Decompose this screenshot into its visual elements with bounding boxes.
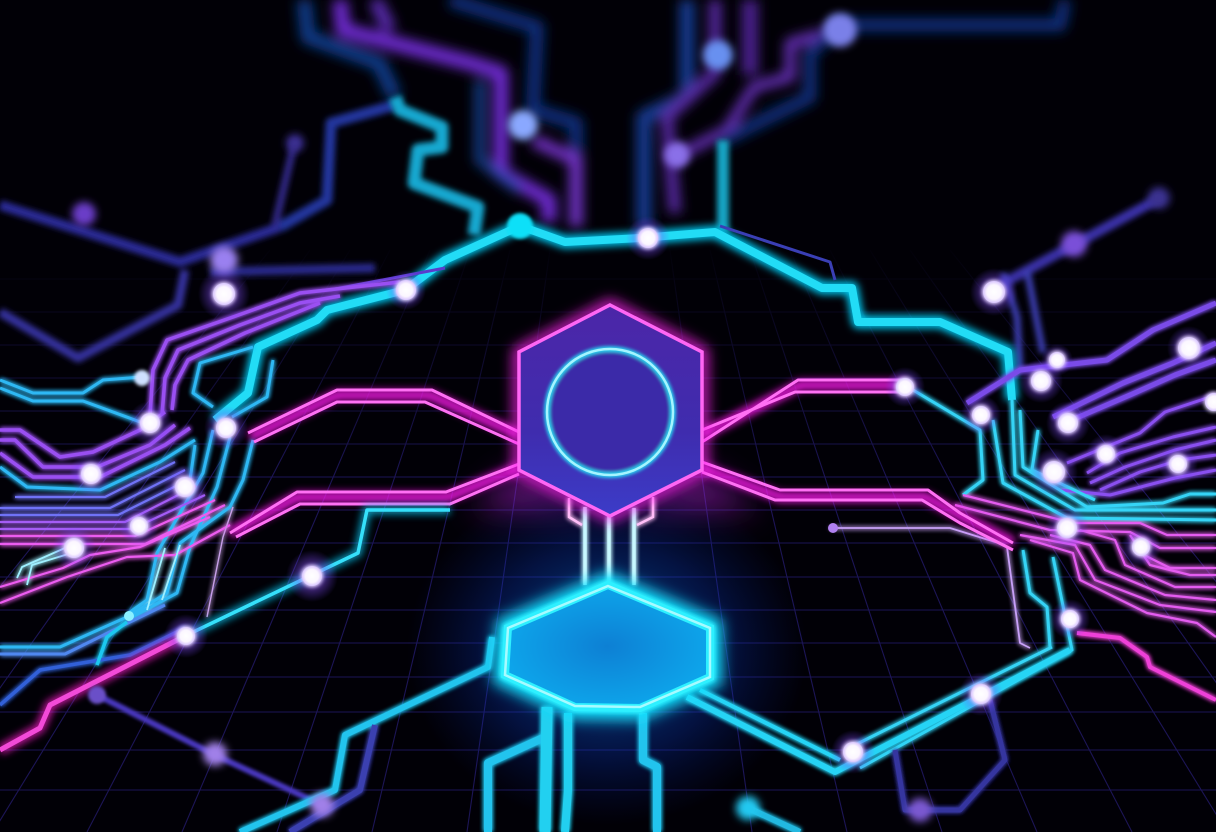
right traces bundle	[830, 303, 1216, 768]
cyan hexagon	[505, 585, 710, 708]
blurred side traces	[0, 105, 1160, 370]
bright cyan upper top trace	[395, 97, 723, 235]
lower cyan glow	[407, 475, 807, 825]
circle ring	[547, 349, 673, 475]
connector traces between hexagons	[569, 497, 653, 590]
main cyan bus	[215, 226, 1012, 420]
magenta glow under central hexagon	[470, 470, 760, 516]
blurred top traces	[304, 0, 1065, 227]
perspective grid	[0, 240, 1216, 832]
lower traces	[240, 637, 1070, 832]
central magenta traces	[230, 380, 1013, 550]
purple hexagon	[519, 305, 702, 516]
lower left magenta and cyan diagonals	[0, 510, 450, 805]
left traces bundle	[0, 282, 400, 705]
